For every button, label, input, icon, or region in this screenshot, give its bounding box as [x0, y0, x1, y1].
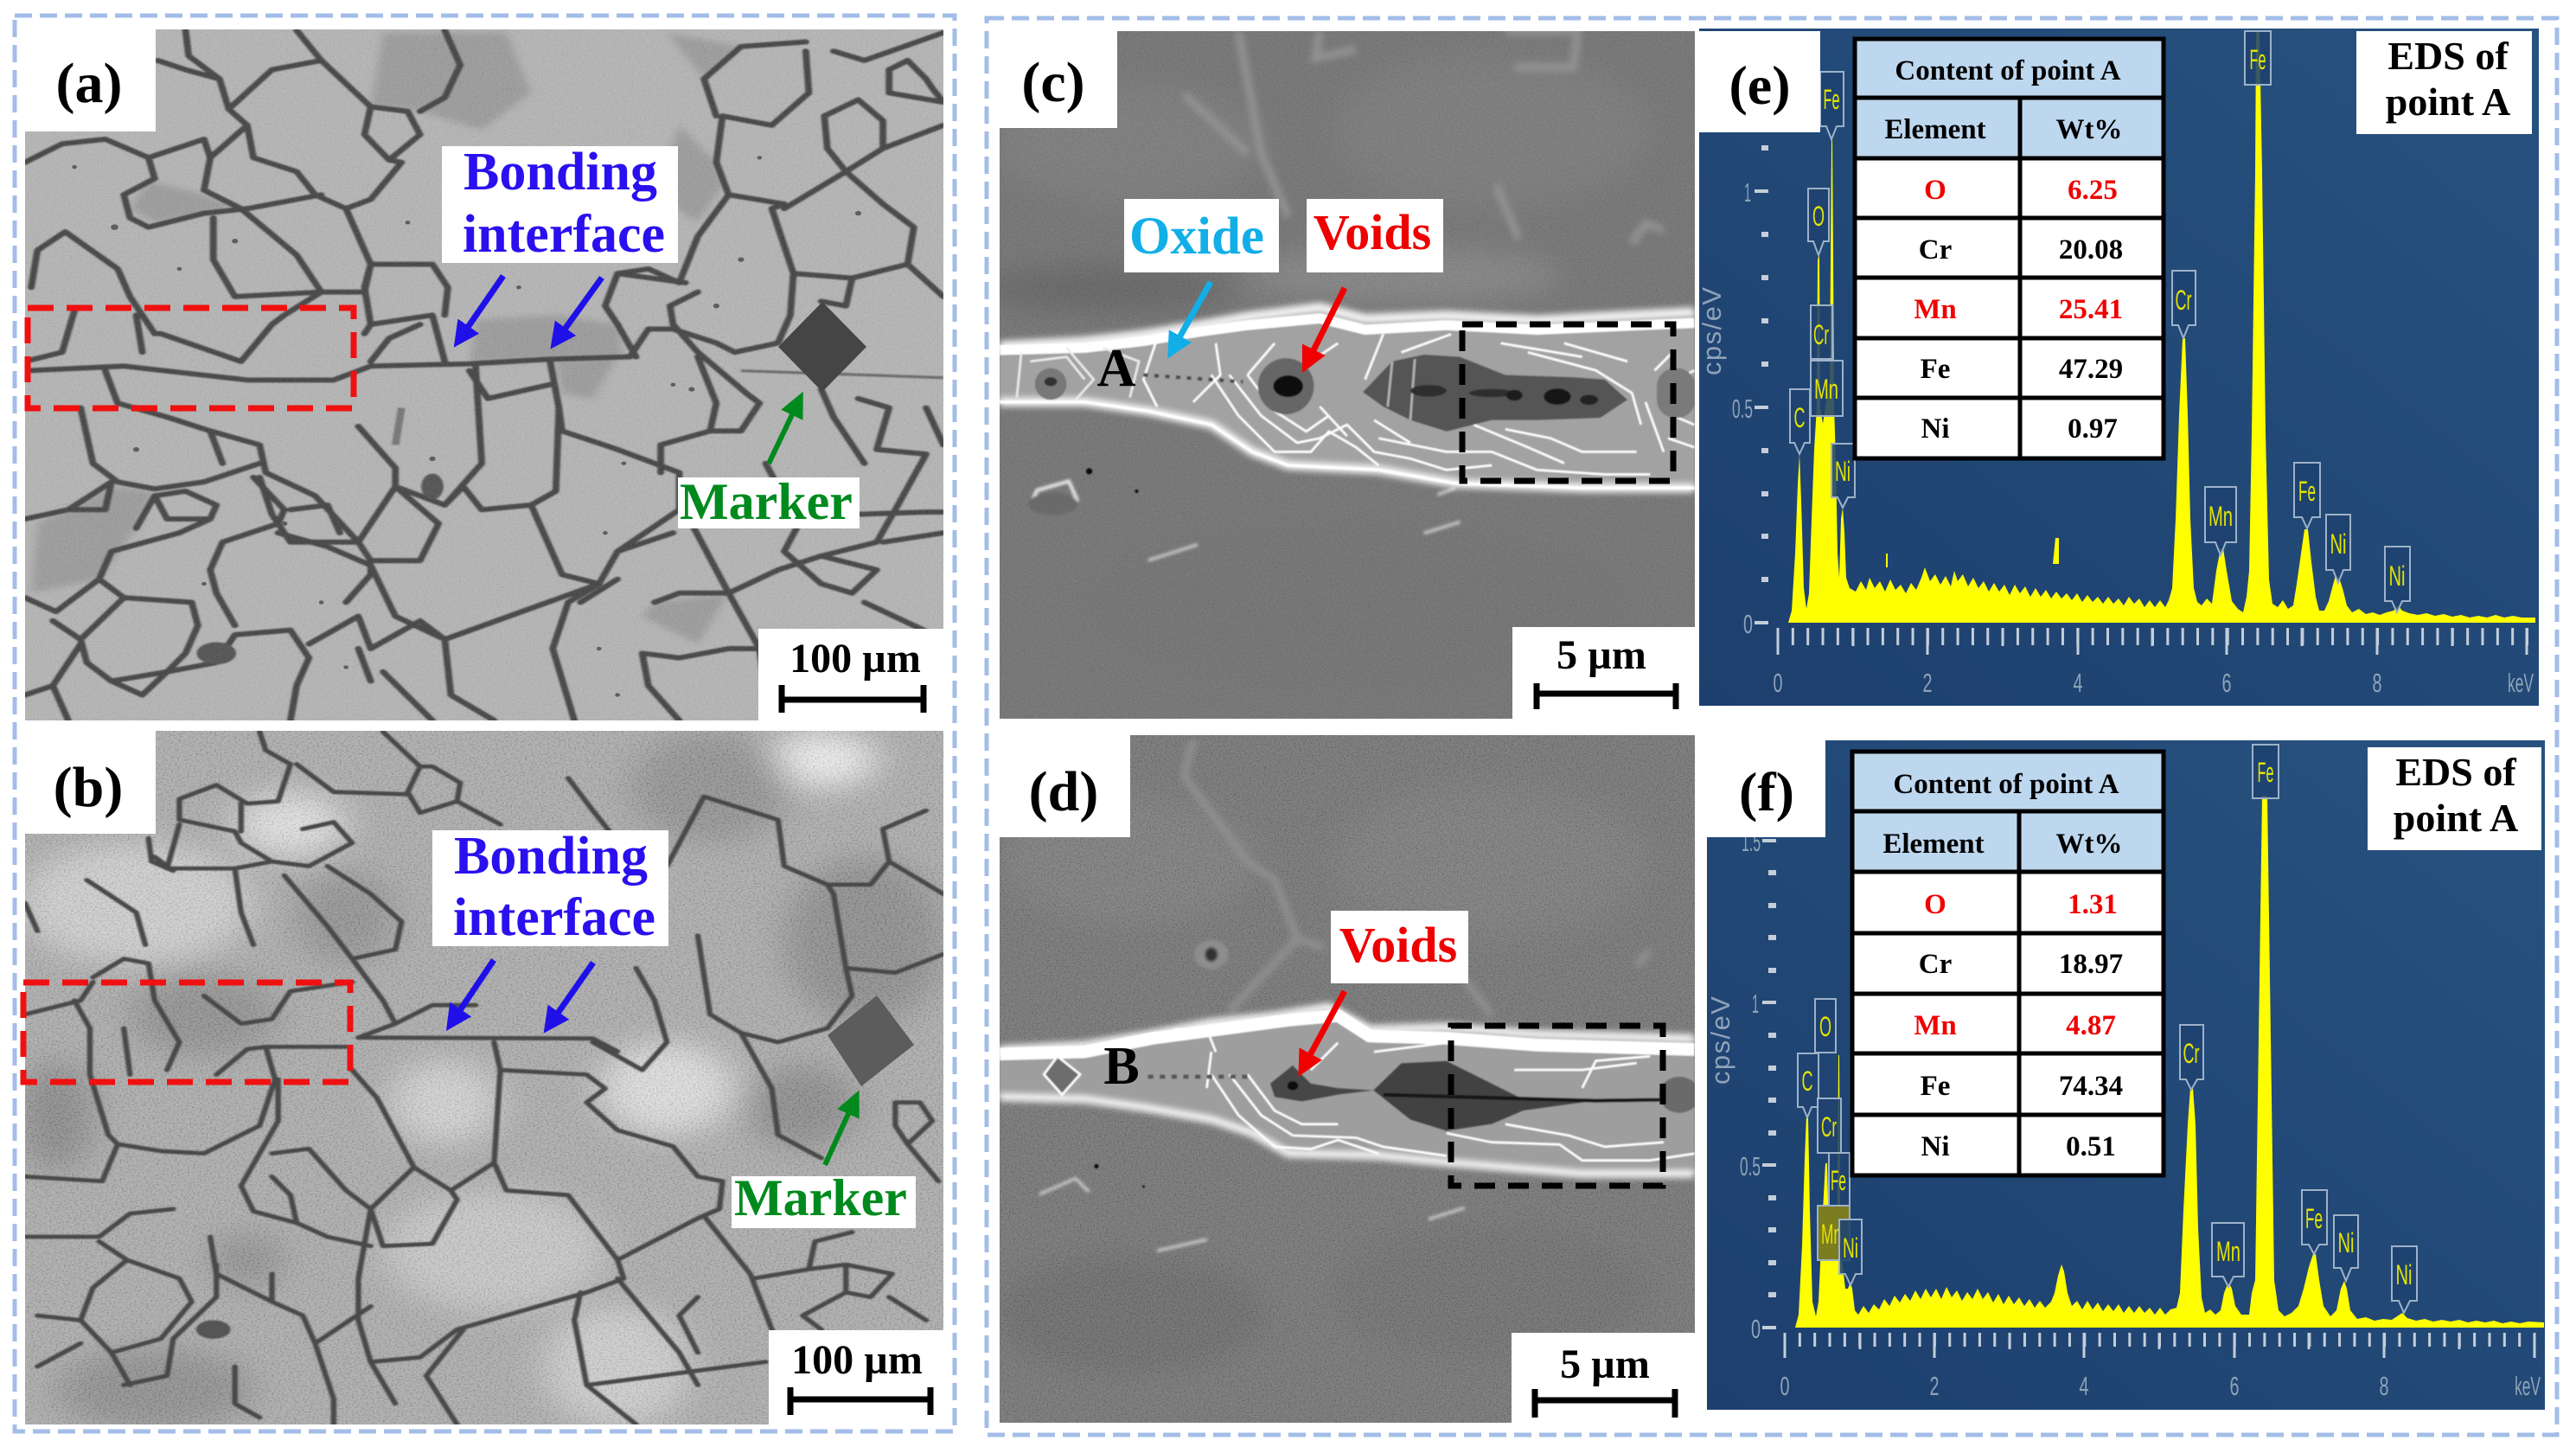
y axis f: cps/eV	[1705, 996, 1735, 1085]
tag C	[1790, 389, 1810, 454]
peak tags e	[1790, 31, 2410, 612]
x axis f: 2	[1930, 1371, 1939, 1401]
tag Fe top	[2253, 745, 2279, 798]
tag O: O	[1812, 201, 1825, 232]
composition table f: 0.51	[2066, 1131, 2116, 1162]
scale bar b: 100 µm	[791, 1337, 923, 1383]
scale bar a: 100 µm	[789, 636, 921, 682]
scale bar c: 5 µm	[1556, 632, 1646, 678]
composition table f: Cr	[1919, 949, 1952, 980]
micrograph b grain structure	[25, 731, 943, 1424]
marker label a: Marker	[680, 473, 853, 530]
y axis e: cps/eV	[1697, 287, 1727, 375]
composition table e: Element	[1884, 114, 1986, 145]
tag C: C	[1802, 1066, 1812, 1097]
composition table e: Content of point A	[1895, 55, 2121, 86]
label (a)	[25, 29, 156, 131]
tag C	[1798, 1053, 1819, 1117]
tag Fe	[1820, 72, 1844, 139]
scale bar d: 5 µm	[1560, 1341, 1650, 1387]
voids arrow c	[1309, 288, 1345, 359]
tag Fe top	[2245, 31, 2271, 85]
composition table e: 6.25	[2068, 175, 2118, 206]
chart background f	[1707, 740, 2545, 1410]
x axis f: 8	[2380, 1371, 2388, 1401]
tag Ni	[1831, 444, 1855, 508]
panel d: SEM image	[994, 726, 1718, 1450]
label (d)	[1000, 735, 1130, 837]
tag Cr	[1818, 1098, 1841, 1153]
label (c): (c)	[1021, 51, 1085, 114]
composition table f: Ni	[1921, 1131, 1949, 1162]
x axis e: 6	[2222, 668, 2231, 698]
tag Mn: Mn	[1821, 1219, 1842, 1250]
composition table f: 1.31	[2068, 889, 2118, 920]
tag Ni K-beta	[2392, 1246, 2417, 1313]
label (c)	[1000, 31, 1117, 128]
x axis f: 4	[2079, 1371, 2089, 1401]
y axis f: 1	[1752, 989, 1759, 1019]
tag O	[1815, 999, 1836, 1053]
bonding interface label a	[442, 143, 678, 264]
bonding interface label a: interface	[463, 205, 665, 264]
tag Ni K-alpha: Ni	[2330, 528, 2347, 560]
tag Mn	[1811, 361, 1843, 416]
composition table f: O	[1924, 889, 1946, 920]
composition table f: Wt%	[2056, 829, 2122, 860]
tag Fe K-beta	[2302, 1190, 2327, 1254]
y axis e: 1	[1744, 177, 1751, 208]
tag Ni K-beta: Ni	[2395, 1259, 2413, 1290]
scale bar d	[1512, 1333, 1695, 1423]
panel c: SEM image	[981, 17, 1718, 741]
tag Ni K-beta: Ni	[2388, 560, 2406, 592]
chart background e	[1699, 29, 2539, 706]
y axis e	[1697, 148, 1768, 639]
tag Cr right	[2180, 1025, 2203, 1090]
y axis f: 1.5	[1742, 827, 1761, 857]
composition table f: 74.34	[2059, 1071, 2123, 1102]
tag Mn right: Mn	[2208, 501, 2233, 532]
composition table f: 18.97	[2059, 949, 2123, 980]
EDS label e: EDS of	[2387, 34, 2509, 78]
tag Mn	[1818, 1206, 1850, 1260]
label (e): (e)	[1729, 54, 1791, 116]
label (b): (b)	[54, 756, 123, 819]
composition table f	[1852, 752, 2164, 1175]
tag Ni	[1839, 1219, 1862, 1285]
left dashed frame	[15, 16, 955, 1431]
EDS label f: point A	[2394, 796, 2518, 840]
tag Cr	[1811, 305, 1832, 359]
tag Fe K-beta: Fe	[2298, 476, 2316, 507]
label (a): (a)	[56, 52, 122, 115]
x axis f: 0	[1780, 1371, 1790, 1401]
label (f)	[1695, 735, 1825, 837]
bonding interface label b: Bonding	[454, 827, 648, 886]
composition table e: Wt%	[2056, 114, 2122, 145]
voids label d	[1331, 911, 1468, 983]
spectrum e	[1788, 31, 2535, 623]
blue arrows a	[463, 276, 602, 336]
oxide label: Oxide	[1129, 208, 1264, 266]
composition table e	[1855, 39, 2164, 458]
tag Ni K-alpha: Ni	[2338, 1227, 2354, 1258]
composition table f: Element	[1882, 829, 1985, 860]
tag Fe: Fe	[1823, 84, 1840, 115]
voids arrow d	[1306, 991, 1345, 1063]
y axis e: 0	[1743, 609, 1753, 639]
tag Fe K-beta	[2294, 463, 2320, 528]
SEM image c	[1000, 31, 1695, 719]
composition table f: Content of point A	[1893, 769, 2119, 800]
composition table e: 0.97	[2068, 413, 2118, 445]
tag Fe small: Fe	[1831, 1165, 1846, 1196]
EDS label f: EDS of	[2395, 750, 2516, 794]
tag Mn: Mn	[1814, 374, 1838, 405]
micrograph a grain structure	[25, 29, 943, 720]
tag Fe top: Fe	[2257, 757, 2274, 788]
composition table f: Fe	[1921, 1071, 1950, 1102]
panel b: optical micrograph	[0, 718, 988, 1453]
tag O: O	[1819, 1011, 1831, 1042]
tag Ni: Ni	[1835, 456, 1851, 487]
composition table e: 20.08	[2059, 234, 2123, 266]
x axis e: 0	[1773, 668, 1783, 698]
composition table e: O	[1924, 175, 1946, 206]
bonding interface label b	[432, 827, 668, 947]
label (d): (d)	[1029, 760, 1098, 823]
tag Ni K-beta	[2385, 547, 2410, 612]
panel e: EDS spectrum	[1697, 29, 2539, 706]
tag Mn right: Mn	[2216, 1236, 2240, 1267]
x axis e: keV	[2508, 668, 2534, 698]
y axis f: 0.5	[1740, 1151, 1761, 1181]
tag Cr right: Cr	[2176, 285, 2192, 316]
tag Fe small	[1829, 1153, 1850, 1206]
x axis e: 4	[2074, 668, 2082, 698]
marker indentation a	[778, 302, 866, 392]
tag Fe top: Fe	[2250, 44, 2266, 75]
oxide arrow	[1175, 282, 1211, 345]
composition table e: 25.41	[2059, 294, 2123, 325]
voids label c	[1307, 199, 1443, 272]
scale bar b	[769, 1330, 945, 1424]
bonding interface label a: Bonding	[463, 143, 657, 202]
marker indentation b	[828, 995, 914, 1086]
tag C: C	[1793, 402, 1806, 433]
tag Ni K-alpha	[2326, 515, 2350, 583]
label (e)	[1699, 31, 1820, 132]
point A: A	[1097, 339, 1136, 398]
tag Mn right	[2212, 1223, 2244, 1287]
point B: B	[1103, 1037, 1140, 1096]
oxide label	[1124, 199, 1279, 272]
tag Cr: Cr	[1813, 319, 1829, 350]
interface band	[1000, 307, 1696, 493]
tag Cr right: Cr	[2183, 1038, 2200, 1069]
marker label b: Marker	[734, 1169, 907, 1226]
green arrow b	[825, 1104, 853, 1165]
tag Ni: Ni	[1843, 1232, 1858, 1264]
tag Cr: Cr	[1821, 1111, 1837, 1143]
composition table e: Cr	[1919, 234, 1952, 266]
spectrum f	[1795, 796, 2544, 1328]
composition table f: Mn	[1914, 1010, 1957, 1041]
label (b)	[25, 731, 156, 834]
x axis e: 8	[2373, 668, 2381, 698]
x axis e: 2	[1923, 668, 1932, 698]
scale bar a	[758, 629, 943, 720]
red dashed box b	[23, 983, 350, 1082]
tag Fe K-beta: Fe	[2305, 1203, 2323, 1234]
tag Mn right	[2205, 487, 2236, 555]
bonding interface label b: interface	[453, 888, 655, 947]
panel a: optical micrograph	[0, 0, 988, 741]
panel f: EDS spectrum	[1695, 735, 2545, 1410]
black dashed box d	[1451, 1026, 1663, 1186]
red dashed box a	[28, 308, 354, 408]
y axis f	[1705, 827, 1776, 1344]
composition table e: Mn	[1914, 294, 1957, 325]
label (f): (f)	[1739, 761, 1794, 823]
x axis f: keV	[2515, 1371, 2541, 1401]
x axis f	[1780, 1333, 2541, 1401]
y axis e: 0.5	[1732, 394, 1753, 424]
right dashed frame	[987, 18, 2557, 1435]
composition table e: Fe	[1921, 354, 1950, 385]
SEM image d	[1000, 735, 1695, 1423]
green arrow a	[769, 406, 796, 464]
blue arrows b	[455, 960, 593, 1021]
interface band	[1000, 1007, 1700, 1188]
composition table e: Ni	[1921, 413, 1949, 445]
peak tags f	[1798, 745, 2417, 1313]
composition table f: 4.87	[2066, 1010, 2116, 1041]
voids label d: Voids	[1339, 917, 1457, 973]
EDS label f	[2368, 747, 2541, 850]
tag O	[1808, 189, 1829, 255]
tag Ni K-alpha	[2334, 1215, 2358, 1281]
EDS label e	[2356, 31, 2532, 134]
tag Cr right	[2172, 271, 2196, 338]
x axis f: 6	[2229, 1371, 2240, 1401]
voids label c: Voids	[1314, 204, 1431, 260]
y axis f: 0	[1751, 1314, 1761, 1344]
x axis e	[1773, 628, 2534, 698]
scale bar c	[1512, 627, 1695, 719]
black dashed box c	[1462, 324, 1673, 481]
EDS label e: point A	[2386, 80, 2510, 124]
composition table e: 47.29	[2059, 354, 2123, 385]
